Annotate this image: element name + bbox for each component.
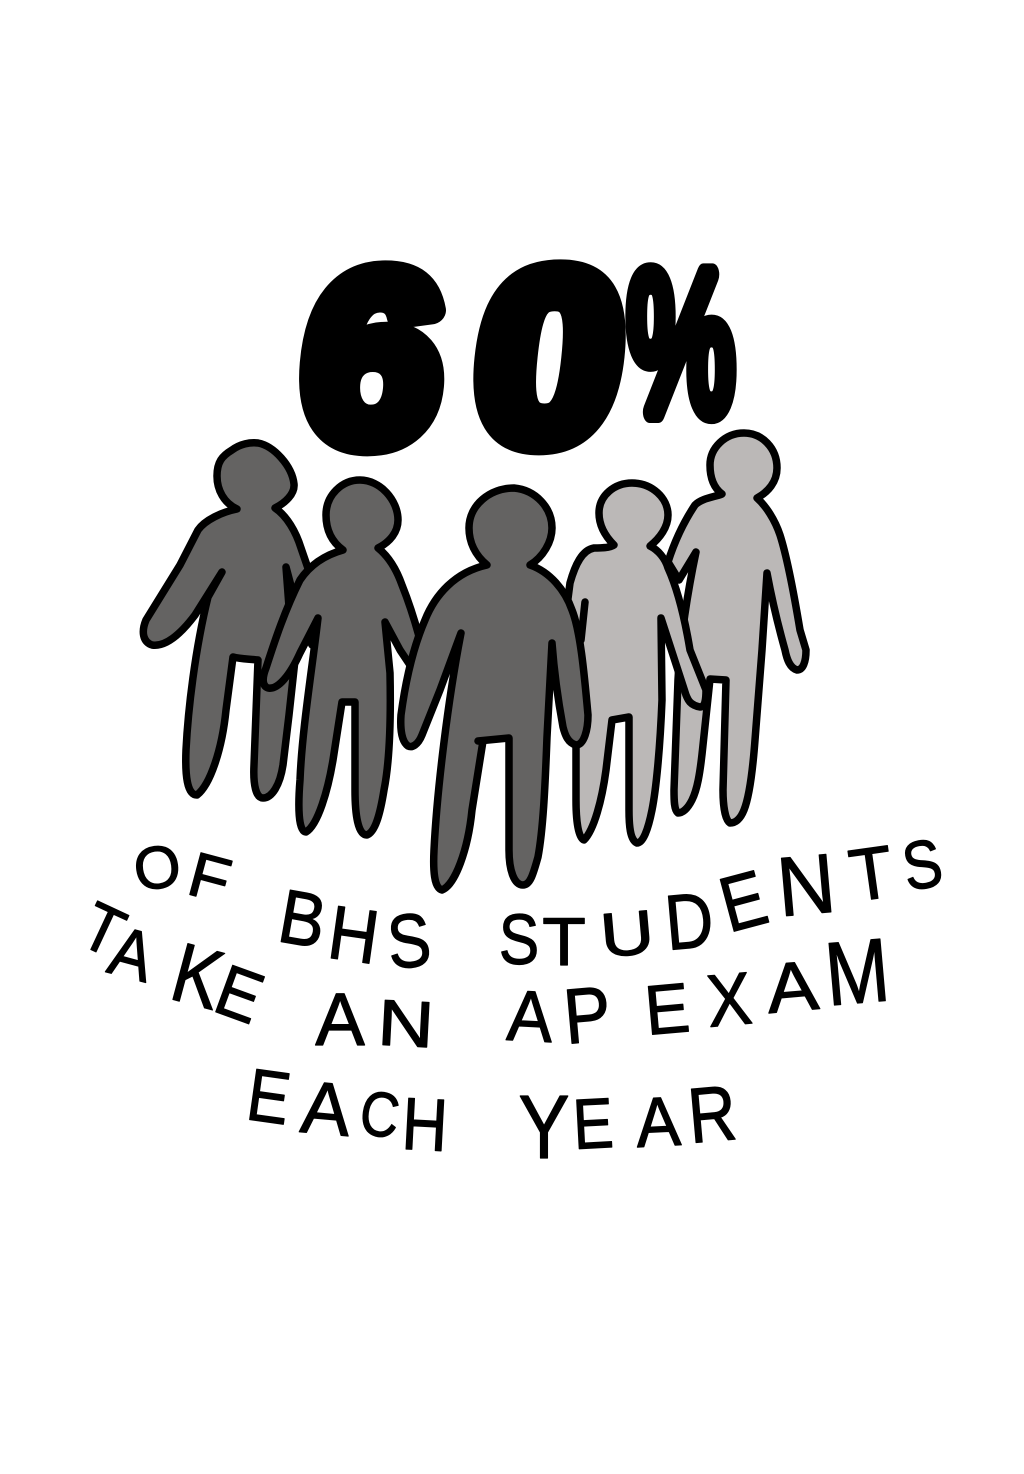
caption line 1: S [499,899,539,979]
caption line 2 [70,887,893,1062]
caption line 2: P [560,970,614,1061]
title: 60% statistic: 6 [293,224,454,492]
caption line 3: A [634,1082,683,1162]
caption line 3: H [400,1082,450,1167]
caption line 1: B [273,874,332,965]
caption line 3: C [356,1078,404,1152]
caption line 1: S [384,896,434,985]
caption line 2: A [101,912,162,998]
caption line 3 [242,1053,740,1177]
caption line 2: X [703,956,755,1043]
caption line 2: T [70,887,137,972]
caption line 3: Y [518,1076,570,1177]
student 2: dark [263,480,420,835]
caption line 1 [129,825,948,985]
title: 60% statistic [293,222,734,492]
title: 60% statistic: 0 [464,222,635,491]
caption line 2: A [505,974,555,1058]
title: 60% statistic: % [628,231,734,454]
caption line 2: K [162,924,233,1028]
caption line 1: D [661,876,717,967]
student 1: dark, back left [143,443,322,798]
student 4: light [560,483,706,843]
caption line 1: T [844,831,898,918]
caption: hand-lettered text on three curved lines [70,825,948,1177]
caption line 1: S [897,825,948,906]
caption line 1: U [597,897,657,971]
figure group: five students, three dark and two light [143,433,806,890]
student 3: dark, front centre [401,488,588,890]
caption line 2: A [315,978,365,1061]
caption line 2: M [821,919,893,1025]
caption line 2: N [376,987,436,1062]
caption line 2: E [642,969,693,1050]
caption line 3: A [298,1065,355,1152]
caption line 1: H [323,891,384,981]
caption line 2: A [763,945,821,1028]
caption line 2: E [205,949,274,1040]
caption line 1: N [773,837,839,935]
student 5: light, back right [668,433,806,823]
caption line 1: E [711,854,776,949]
caption line 3: E [242,1053,295,1141]
caption line 3: E [571,1082,615,1164]
caption line 3: R [685,1069,740,1160]
caption line 1: O [129,831,185,904]
caption line 1: T [542,904,586,980]
caption line 1: F [181,838,238,917]
